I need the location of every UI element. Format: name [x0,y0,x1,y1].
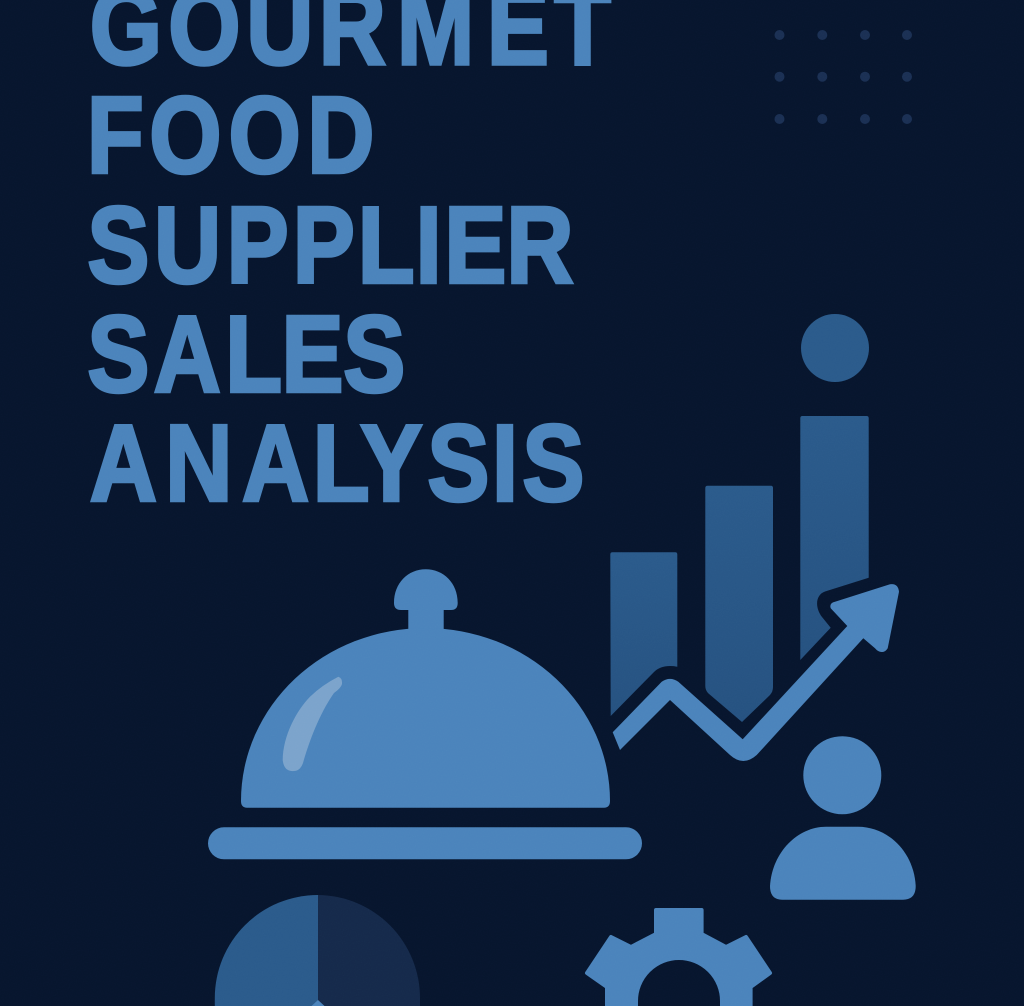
title [87,0,611,524]
bar: medium [705,486,773,722]
pie slice: left [215,895,318,1006]
person shoulders [770,827,916,900]
icon: person [770,736,916,900]
serving plate [208,827,642,859]
bar: tall [800,416,869,660]
icon: gear [587,910,770,1006]
person head [803,736,881,814]
icon: cloche [208,569,642,859]
pie chart [215,895,420,1006]
trend arrow [613,584,899,761]
title: SALES [88,293,405,415]
bar chart [610,416,869,722]
pie slice: bottom tip [312,1000,324,1006]
bar: short [610,552,677,716]
icon: floating data point circle [801,314,869,382]
decorative dot grid [774,30,912,124]
title: ANALYSIS [90,402,584,524]
pie slice: right [318,895,420,1006]
cloche knob [394,569,458,632]
title: FOOD [87,74,374,196]
title: SUPPLIER [88,184,573,306]
cloche dome [241,628,610,808]
dome highlight [283,677,342,771]
